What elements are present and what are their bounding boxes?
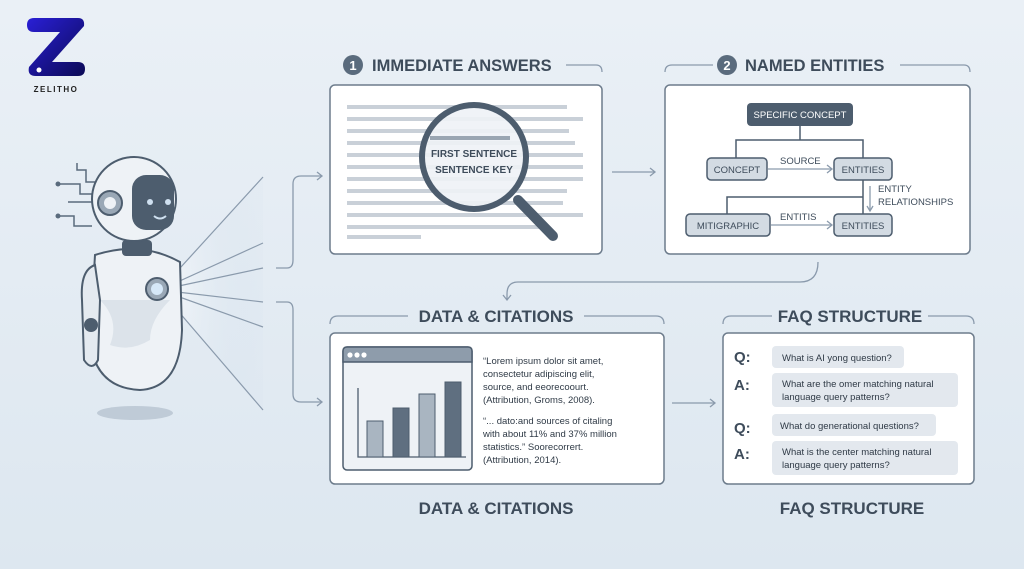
node: entities: ENTITIES — [842, 165, 884, 176]
heading 1: IMMEDIATE ANSWERS — [372, 57, 552, 75]
citation text: consectetur adipiscing elit, — [483, 369, 594, 380]
citation text: (Attribution, 2014). — [483, 455, 561, 466]
panel: named entities: SOURCE — [780, 156, 821, 167]
heading 1 — [343, 55, 602, 75]
heading 1: 1 — [349, 58, 357, 73]
icon: magnifier: SENTENCE KEY — [435, 165, 513, 176]
panel: immediate answers — [330, 85, 602, 254]
citation text: source, and eeorecoourt. — [483, 382, 589, 393]
heading 4: FAQ STRUCTURE — [778, 307, 922, 326]
panel: faq: What is AI yong question? — [782, 353, 892, 364]
citation text: “... dato:and sources of citaling — [483, 416, 612, 427]
node: specific concept: SPECIFIC CONCEPT — [754, 110, 847, 121]
panel: faq: What do generational questions? — [780, 421, 919, 432]
logo: ZELITHO — [34, 85, 78, 94]
bar chart window — [343, 347, 472, 470]
panel: faq: Q: — [734, 420, 751, 437]
heading 2: NAMED ENTITIES — [745, 57, 884, 75]
panel: faq: A: — [734, 377, 750, 394]
heading 3: DATA & CITATIONS — [419, 307, 573, 326]
panel: faq: Q: — [734, 349, 751, 366]
heading 4 — [723, 307, 974, 326]
panel: faq — [723, 333, 974, 484]
panel: faq: What is the center matching natural — [782, 447, 931, 458]
bracket arrows — [276, 172, 322, 406]
node: entities 2 — [834, 214, 892, 236]
node: entities — [834, 158, 892, 180]
panel: named entities: ENTITIS — [780, 212, 816, 223]
panel: faq: What are the omer matching natural — [782, 379, 934, 390]
icon: magnifier: FIRST SENTENCE — [431, 149, 517, 160]
logo — [27, 18, 85, 94]
panel: faq: language query patterns? — [782, 392, 890, 403]
panel: faq: language query patterns? — [782, 460, 890, 471]
node: mitigraphic — [686, 214, 770, 236]
robot — [56, 157, 263, 420]
node: concept — [707, 158, 767, 180]
node: specific concept — [747, 103, 853, 126]
node: concept: CONCEPT — [714, 165, 760, 176]
caption: data & citations: DATA & CITATIONS — [419, 499, 573, 518]
panel: named entities: ENTITY — [878, 184, 912, 195]
caption: faq structure: FAQ STRUCTURE — [780, 499, 924, 518]
heading 2 — [665, 55, 970, 75]
arrow: 2 to 3 — [503, 262, 818, 300]
citation text: statistics.” Soorecorrert. — [483, 442, 583, 453]
panel: faq: A: — [734, 446, 750, 463]
citation text: “Lorem ipsum dolor sit amet, — [483, 356, 603, 367]
panel: data and citations — [330, 333, 664, 484]
heading 3 — [330, 307, 664, 326]
arrow: 1 to 2 — [612, 168, 655, 176]
node: entities 2: ENTITIES — [842, 221, 884, 232]
panel: named entities: RELATIONSHIPS — [878, 197, 953, 208]
heading 2: 2 — [723, 58, 731, 73]
panel: named entities — [665, 85, 970, 254]
citation text: (Attribution, Groms, 2008). — [483, 395, 595, 406]
node: mitigraphic: MITIGRAPHIC — [697, 221, 759, 232]
arrow: 3 to 4 — [672, 399, 715, 407]
citation text: with about 11% and 37% million — [482, 429, 617, 440]
icon: magnifier — [422, 105, 553, 236]
citation text — [482, 356, 617, 466]
